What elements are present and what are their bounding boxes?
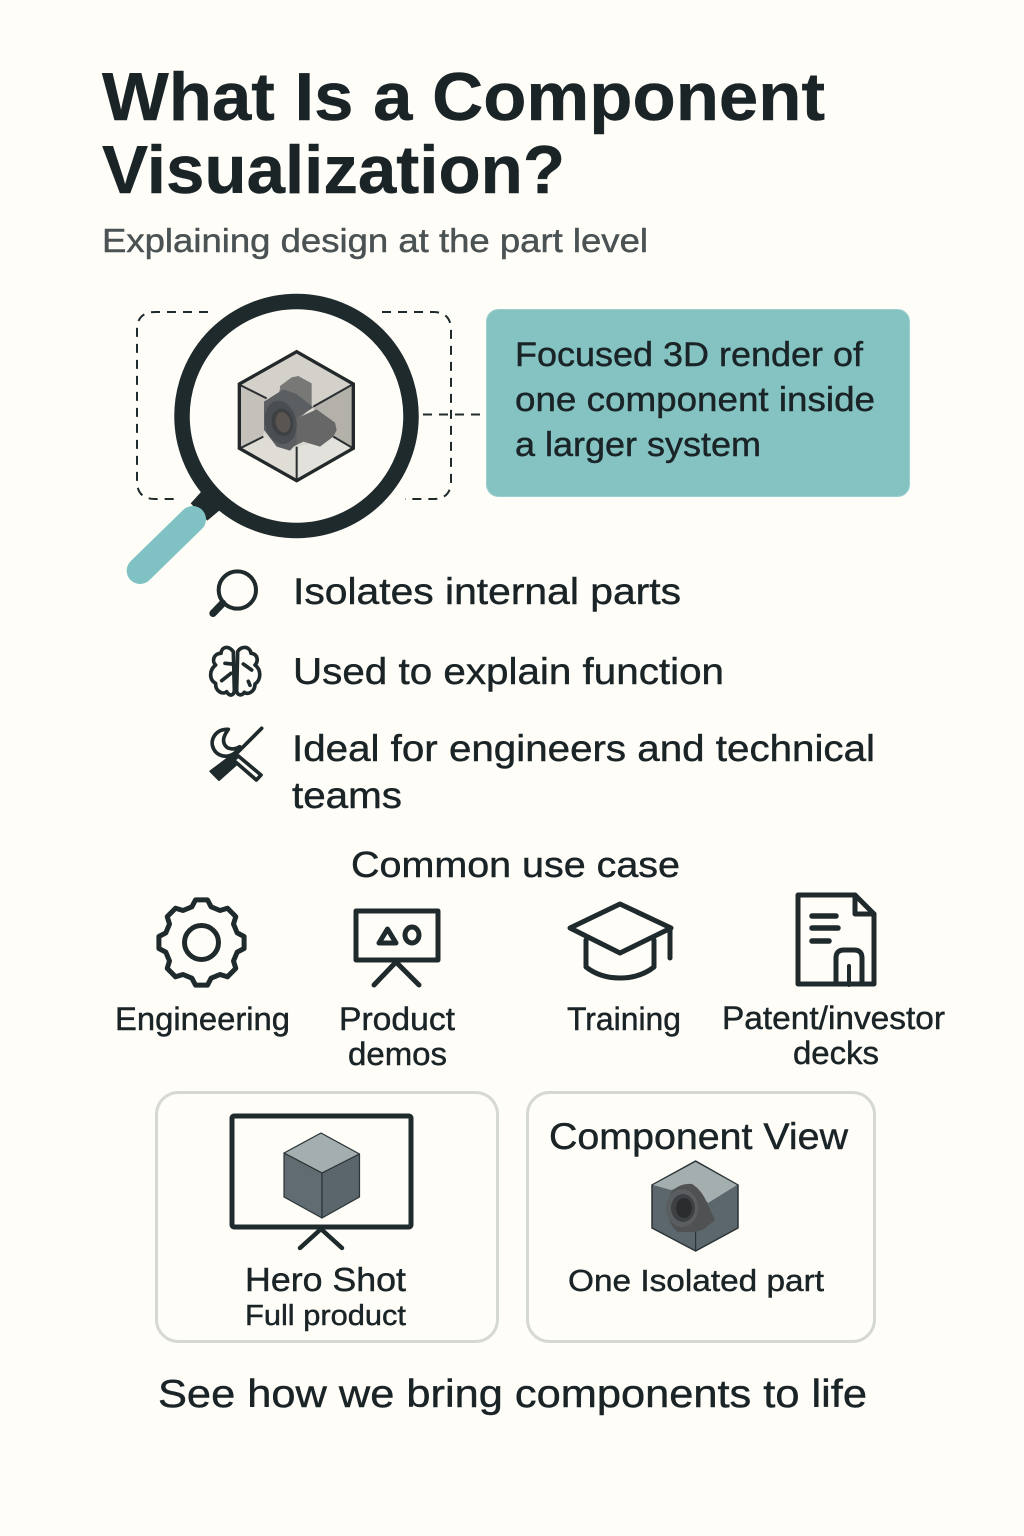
callout: definition: one component inside: [515, 381, 875, 419]
icon: wrench and screwdriver: [210, 728, 262, 780]
icon: isolated part: [652, 1161, 738, 1251]
title: Visualization?: [102, 132, 565, 208]
icon: search: [213, 571, 256, 613]
use case: engineering: [115, 900, 290, 1037]
icon: gear: [159, 900, 244, 985]
callout: definition: Focused 3D render of: [515, 336, 864, 374]
panel: hero shot: [156, 1092, 498, 1342]
call to action: See how we bring components to life: [158, 1373, 867, 1416]
icon: brain: [211, 647, 260, 695]
subtitle: Explaining design at the part level: [102, 222, 648, 259]
bullet: engineers: [292, 728, 875, 816]
icon: magnifying glass with component: [140, 302, 411, 571]
panel: component view: One Isolated part: [568, 1263, 824, 1298]
title: What Is a Component: [102, 59, 825, 135]
use case: engineering: Engineering: [115, 1001, 290, 1037]
use case: product demos: Product: [339, 1001, 455, 1037]
use case: product demos: demos: [348, 1036, 447, 1072]
component in transparent housing: [239, 352, 353, 481]
heading: common use case: Common use case: [351, 844, 680, 885]
use case: training: Training: [567, 1001, 681, 1037]
panel: component view: Component View: [549, 1116, 848, 1157]
icon: presentation board: [356, 911, 438, 985]
magnifier handle: [140, 492, 220, 571]
bullet: engineers: Ideal for engineers and technical: [292, 728, 875, 769]
panel: component view: [528, 1092, 874, 1342]
icon: monitor: [232, 1116, 411, 1248]
callout: definition: [486, 310, 910, 496]
panel: hero shot: Full product: [245, 1300, 406, 1332]
use case: patent and investor decks: Patent/investor: [722, 1000, 945, 1036]
dashed focus frame: [137, 312, 486, 499]
icon: full product cube: [284, 1133, 360, 1218]
icon: graduation cap: [570, 904, 671, 978]
panel: hero shot: Hero Shot: [245, 1261, 406, 1298]
bullet: engineers: teams: [292, 775, 402, 816]
use case: patent and investor decks: decks: [793, 1035, 879, 1071]
bullet: explain function: Used to explain function: [293, 651, 724, 692]
bullet: isolates: Isolates internal parts: [293, 571, 681, 612]
callout: definition: a larger system: [515, 426, 761, 464]
use case: training: [567, 904, 681, 1037]
use case: patent and investor decks: [722, 895, 945, 1071]
magnifier lens: [182, 302, 411, 530]
icon: document: [798, 895, 874, 985]
title: [102, 59, 825, 208]
use case: product demos: [339, 911, 455, 1072]
